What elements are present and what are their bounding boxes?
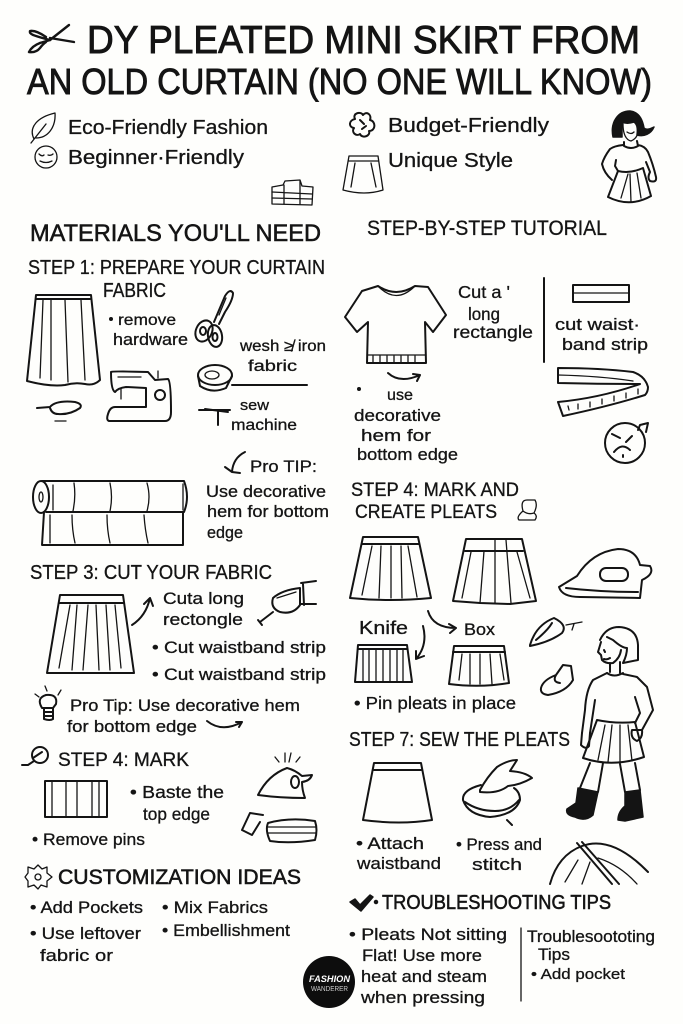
illustration: iron bbox=[559, 549, 651, 598]
cut waistband text bbox=[555, 316, 648, 354]
heading: tutorial: STEP-BY-STEP TUTORIAL bbox=[367, 217, 607, 240]
icon: arrow right bbox=[388, 373, 420, 381]
logo badge: WANDERER bbox=[311, 984, 348, 993]
step 4 heading left: STEP 4: MARK bbox=[58, 750, 189, 771]
customization list bbox=[30, 898, 290, 965]
illustration: yarn basket bbox=[550, 842, 648, 884]
icon: check mark bbox=[350, 895, 378, 911]
icon: sewing machine bbox=[107, 371, 171, 421]
icon: measuring tape bbox=[558, 368, 648, 416]
step 1 notes: fabric bbox=[248, 358, 297, 375]
customization list: fabric or bbox=[40, 946, 113, 965]
pro tip: edge bbox=[207, 524, 243, 542]
illustration: box pleats bbox=[449, 646, 509, 686]
logo badge: FASHION bbox=[309, 974, 351, 985]
step 4 notes: • Remove pins bbox=[32, 831, 145, 849]
icon: small iron bbox=[530, 618, 582, 646]
step 3 heading: STEP 3: CUT YOUR FABRIC bbox=[30, 562, 272, 584]
icon: tape roll bbox=[198, 365, 307, 391]
attach press text: • Attach bbox=[356, 834, 424, 853]
benefits list: Eco-Friendly Fashion bbox=[68, 116, 268, 139]
illustration: pleated skirt B bbox=[453, 539, 536, 604]
step 4 heading right bbox=[351, 480, 519, 523]
icon: ribbon bbox=[242, 813, 316, 842]
cut waistband text: cut waist· bbox=[555, 316, 640, 334]
heading: materials: MATERIALS YOU'LL NEED bbox=[30, 220, 321, 247]
use decorative text: use bbox=[387, 387, 413, 404]
pin text: • Pin pleats in place bbox=[354, 693, 516, 713]
pro tip 2: Pro Tip: Use decorative hem bbox=[70, 697, 300, 715]
icon: sewing scissors bbox=[192, 291, 233, 348]
troubleshooting list bbox=[349, 925, 507, 1007]
troubleshooting side note: Tips bbox=[538, 946, 570, 964]
icon: pincushion bbox=[541, 665, 573, 695]
step 4 heading right: STEP 4: MARK AND bbox=[351, 480, 519, 501]
attach press text bbox=[356, 834, 542, 874]
troubleshooting list: heat and steam bbox=[361, 967, 487, 986]
attach press text: • Press and bbox=[456, 835, 542, 854]
step 1 notes: remove bbox=[118, 312, 176, 329]
troubleshooting heading: TROUBLESHOOTING TIPS bbox=[382, 892, 611, 914]
step 1 heading line 2: FABRIC bbox=[103, 280, 166, 302]
cut text: long bbox=[468, 304, 500, 324]
cut text: Cut a ' bbox=[458, 282, 510, 302]
benefits list: Beginner·Friendly bbox=[68, 146, 245, 169]
step 1 notes bbox=[109, 312, 326, 434]
illustration: hand and hoop bbox=[463, 760, 532, 825]
title: DY PLEATED MINI SKIRT FROM bbox=[87, 19, 640, 62]
icon: clover bbox=[350, 113, 374, 137]
use decorative text: bottom edge bbox=[357, 446, 458, 464]
benefits list: Unique Style bbox=[388, 149, 513, 172]
benefits list: Budget-Friendly bbox=[388, 114, 550, 137]
pro tip 2: for bottom edge bbox=[67, 718, 197, 736]
benefits list bbox=[31, 113, 550, 193]
step 4 notes: • Baste the bbox=[130, 782, 224, 802]
icon: magnifier bbox=[22, 747, 48, 765]
icon: scissors bbox=[29, 25, 74, 52]
step 4 heading right: CREATE PLEATS bbox=[355, 502, 497, 523]
step 3 notes: • Cut waistband strip bbox=[152, 639, 326, 657]
use decorative text: hem for bbox=[361, 427, 432, 445]
step 1 notes: sew bbox=[240, 397, 269, 414]
illustration: t-shirt bbox=[345, 286, 446, 363]
troubleshooting side note bbox=[527, 928, 655, 983]
illustration: step 3 skirt bbox=[47, 595, 134, 673]
illustration: fabric roll bbox=[33, 481, 187, 545]
use decorative text bbox=[354, 387, 458, 464]
icon: face badge bbox=[605, 423, 648, 463]
pro tip: hem for bottom bbox=[207, 503, 329, 521]
step 3 notes: rectongle bbox=[163, 610, 243, 629]
illustration: basted fabric bbox=[45, 781, 107, 817]
cut waistband text: band strip bbox=[562, 336, 648, 354]
pro tip: Pro TIP: bbox=[250, 457, 317, 476]
divider bbox=[543, 278, 545, 362]
icon: small skirt bbox=[343, 156, 383, 193]
icon: seam ripper bbox=[37, 402, 81, 421]
step 4 notes: top edge bbox=[143, 804, 210, 824]
step 3 notes: • Cut waistband strip bbox=[152, 666, 326, 684]
icon: iron hat bbox=[258, 753, 312, 798]
attach press text: stitch bbox=[472, 855, 522, 874]
icon: small hat bbox=[518, 500, 536, 520]
step 7 heading: STEP 7: SEW THE PLEATS bbox=[349, 729, 570, 751]
icon: smile face bbox=[35, 146, 57, 168]
step 1 notes: hardware bbox=[113, 331, 188, 349]
knife box labels: Knife bbox=[359, 618, 408, 638]
troubleshooting side note: • Add pocket bbox=[531, 967, 625, 983]
step 3 notes: Cuta long bbox=[163, 589, 244, 608]
icon: leaf bbox=[31, 113, 55, 143]
illustration: knife pleats bbox=[355, 645, 412, 682]
step 3 notes bbox=[152, 589, 326, 684]
icon: curved arrows bbox=[416, 611, 456, 659]
customization list: • Mix Fabrics bbox=[162, 899, 268, 917]
troubleshooting list: when pressing bbox=[360, 988, 485, 1007]
cut text bbox=[453, 282, 533, 342]
step 1 notes: wesh ≱ iron bbox=[239, 338, 326, 355]
customization list: • Use leftover bbox=[30, 924, 141, 943]
cut text: rectangle bbox=[453, 322, 533, 342]
icon: fabric stack bbox=[272, 180, 313, 205]
icon: curved arrow bbox=[132, 598, 153, 625]
icon: spool tool bbox=[258, 581, 316, 625]
troubleshooting side note: Troublesoototing bbox=[527, 928, 655, 946]
logo badge bbox=[303, 956, 355, 1008]
icon: waistband strip bbox=[573, 285, 629, 302]
troubleshooting list: Flat! Use more bbox=[362, 946, 482, 965]
icon: check arrow bbox=[225, 452, 245, 473]
knife box labels bbox=[359, 618, 496, 639]
customization list: • Embellishment bbox=[162, 922, 290, 940]
pro tip 2 bbox=[67, 697, 300, 736]
customization list: • Add Pockets bbox=[30, 898, 143, 917]
step 1 notes: machine bbox=[231, 417, 297, 434]
illustration: curtain skirt bbox=[27, 295, 100, 386]
step 4 notes bbox=[32, 782, 224, 849]
icon: pin needle bbox=[199, 409, 230, 425]
use decorative text: decorative bbox=[354, 407, 441, 425]
pro tip: Use decorative bbox=[206, 483, 326, 501]
illustration: woman top right bbox=[602, 111, 656, 202]
knife box labels: Box bbox=[464, 620, 496, 639]
illustration: woman standing bbox=[567, 627, 653, 821]
troubleshooting list: • Pleats Not sitting bbox=[349, 925, 507, 944]
illustration: plain skirt bbox=[363, 763, 432, 822]
pro tip bbox=[206, 457, 329, 542]
step 1 heading: STEP 1: PREPARE YOUR CURTAIN bbox=[28, 257, 325, 279]
illustration: pleated skirt A bbox=[350, 537, 431, 600]
icon: gear bbox=[25, 865, 52, 889]
title bbox=[27, 19, 652, 102]
divider bbox=[520, 928, 522, 1001]
attach press text: waistband bbox=[356, 854, 441, 873]
customization heading: CUSTOMIZATION IDEAS bbox=[58, 866, 301, 889]
icon: light bulb bbox=[35, 686, 61, 720]
